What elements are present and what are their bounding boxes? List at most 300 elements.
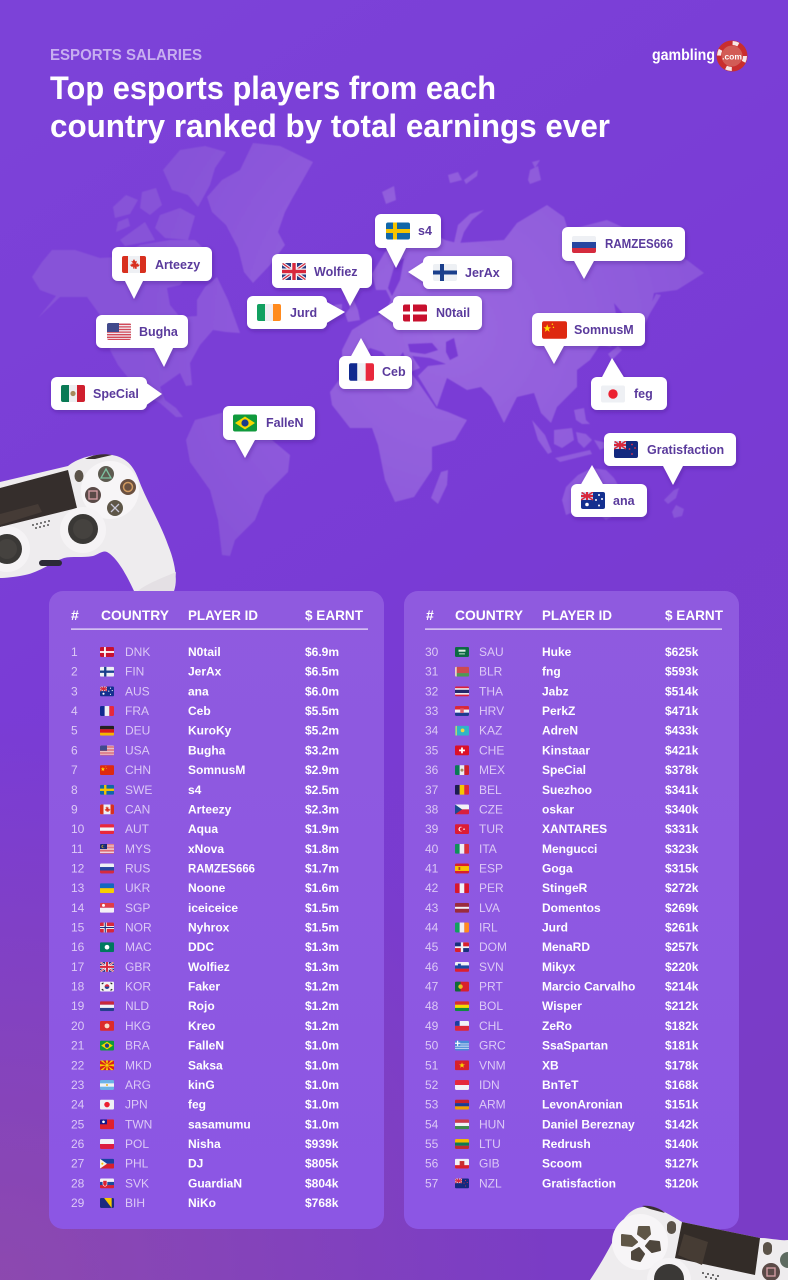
row 48: $212k [665, 999, 699, 1013]
row 43: LVA [479, 901, 500, 915]
row 49: $182k [665, 1019, 699, 1033]
row 26: $939k [305, 1137, 339, 1151]
row 36: SpeCial [542, 763, 586, 777]
row 52: $168k [665, 1078, 699, 1092]
row 57 [425, 1176, 699, 1190]
row 12: $1.7m [305, 862, 339, 876]
row 53: $151k [665, 1098, 699, 1112]
row 31 [425, 665, 699, 679]
row 16: DDC [188, 940, 214, 954]
row 16 [71, 940, 339, 954]
row 54 [425, 1117, 699, 1131]
row 29 [71, 1196, 339, 1210]
table header left: $ EARNT [305, 607, 363, 623]
row 22: Saksa [188, 1058, 223, 1072]
callout: Arteezy (Canada) [112, 247, 212, 299]
callout: Jurd (Ireland) [247, 296, 345, 329]
row 1: $6.9m [305, 645, 339, 659]
row 10: 10 [71, 822, 85, 836]
row 33: 33 [425, 704, 439, 718]
row 53: LevonAronian [542, 1098, 623, 1112]
row 30: Huke [542, 645, 572, 659]
row 38: oskar [542, 802, 574, 816]
row 27 [71, 1157, 339, 1171]
row 52: IDN [479, 1078, 500, 1092]
row 1: N0tail [188, 645, 221, 659]
row 43 [425, 901, 699, 915]
callout: FalleN (Brazil): FalleN [266, 416, 304, 430]
row 4: 4 [71, 704, 78, 718]
row 17: 17 [71, 960, 85, 974]
callout: Bugha (USA): Bugha [139, 325, 179, 339]
row 55: $140k [665, 1137, 699, 1151]
row 13: $1.6m [305, 881, 339, 895]
row 12 [71, 862, 339, 876]
row 18: $1.2m [305, 980, 339, 994]
row 22: 22 [71, 1058, 85, 1072]
row 4 [71, 704, 339, 718]
row 21: 21 [71, 1039, 85, 1053]
row 50 [425, 1039, 699, 1053]
row 14 [71, 901, 339, 915]
row 22: $1.0m [305, 1058, 339, 1072]
row 56: $127k [665, 1157, 699, 1171]
row 27: PHL [125, 1157, 149, 1171]
row 35: Kinstaar [542, 743, 590, 757]
callout: Ceb (France) [339, 338, 412, 389]
row 23 [71, 1078, 339, 1092]
table header left [71, 607, 368, 630]
callout: FalleN (Brazil) [223, 406, 315, 458]
row 2: JerAx [188, 665, 222, 679]
row 35: $421k [665, 743, 699, 757]
table header right: # [426, 607, 434, 623]
callout: N0tail (Denmark): N0tail [436, 306, 470, 320]
callout: JerAx (Finland) [408, 256, 512, 289]
row 49: CHL [479, 1019, 503, 1033]
row 40: $323k [665, 842, 699, 856]
row 3: $6.0m [305, 684, 339, 698]
row 30: SAU [479, 645, 504, 659]
row 28 [71, 1176, 339, 1190]
row 11: MYS [125, 842, 151, 856]
seas [388, 258, 458, 360]
row 28: 28 [71, 1176, 85, 1190]
row 4: $5.5m [305, 704, 339, 718]
row 43: 43 [425, 901, 439, 915]
row 33: $471k [665, 704, 699, 718]
callout: Bugha (USA) [96, 315, 188, 367]
row 5: DEU [125, 724, 150, 738]
row 16: MAC [125, 940, 152, 954]
row 6: Bugha [188, 743, 226, 757]
row 57: $120k [665, 1176, 699, 1190]
row 3 [71, 684, 339, 698]
icon: game controller, top left [0, 454, 176, 591]
row 47: 47 [425, 980, 439, 994]
row 16: $1.3m [305, 940, 339, 954]
row 40: Mengucci [542, 842, 597, 856]
row 17: $1.3m [305, 960, 339, 974]
row 39: $331k [665, 822, 699, 836]
row 15 [71, 920, 339, 934]
callout: s4 (Sweden): s4 [418, 224, 432, 238]
row 44: 44 [425, 920, 439, 934]
row 19 [71, 999, 339, 1013]
callout: JerAx (Finland): JerAx [465, 266, 500, 280]
callout: SpeCial (Mexico) [51, 377, 162, 410]
row 7: SomnusM [188, 763, 245, 777]
row 48: BOL [479, 999, 503, 1013]
row 49: ZeRo [542, 1019, 572, 1033]
row 22: MKD [125, 1058, 152, 1072]
row 6: $3.2m [305, 743, 339, 757]
row 25: $1.0m [305, 1117, 339, 1131]
row 22 [71, 1058, 339, 1072]
row 36: MEX [479, 763, 505, 777]
row 42: $272k [665, 881, 699, 895]
row 23: kinG [188, 1078, 215, 1092]
row 47: Marcio Carvalho [542, 980, 635, 994]
row 7: 7 [71, 763, 78, 777]
row 42: StingeR [542, 881, 588, 895]
row 16: 16 [71, 940, 85, 954]
table header right: PLAYER ID [542, 607, 612, 623]
row 37: Suezhoo [542, 783, 592, 797]
callout: Jurd (Ireland): Jurd [290, 306, 317, 320]
row 11: 11 [71, 842, 84, 856]
row 4: Ceb [188, 704, 211, 718]
row 8: SWE [125, 783, 152, 797]
row 35: 35 [425, 743, 439, 757]
row 25: 25 [71, 1117, 85, 1131]
row 30 [425, 645, 699, 659]
row 48: 48 [425, 999, 439, 1013]
table header left: PLAYER ID [188, 607, 258, 623]
row 12: RAMZES666 [188, 862, 255, 876]
row 52 [425, 1078, 699, 1092]
icon: game controller, bottom right [590, 1206, 788, 1280]
table header right [425, 607, 723, 630]
row 3: ana [188, 684, 209, 698]
row 44 [425, 920, 699, 934]
row 10: AUT [125, 822, 150, 836]
row 2: $6.5m [305, 665, 339, 679]
world map [32, 143, 704, 556]
row 38: 38 [425, 802, 439, 816]
row 4: FRA [125, 704, 149, 718]
row 38 [425, 802, 699, 816]
row 5: KuroKy [188, 724, 232, 738]
row 28: $804k [305, 1176, 339, 1190]
row 39: 39 [425, 822, 439, 836]
row 32: $514k [665, 684, 699, 698]
row 15: $1.5m [305, 920, 339, 934]
row 19: Rojo [188, 999, 215, 1013]
row 19: NLD [125, 999, 149, 1013]
row 7 [71, 763, 339, 777]
panel: ranks 1 to 29 [49, 591, 384, 1229]
row 20: HKG [125, 1019, 151, 1033]
row 12: RUS [125, 862, 150, 876]
row 55: LTU [479, 1137, 501, 1151]
row 38: $340k [665, 802, 699, 816]
row 44: IRL [479, 920, 498, 934]
table header right: COUNTRY [455, 607, 524, 623]
row 56: Scoom [542, 1157, 582, 1171]
row 13: Noone [188, 881, 226, 895]
row 1 [71, 645, 339, 659]
row 9: $2.3m [305, 802, 339, 816]
row 21: FalleN [188, 1039, 224, 1053]
row 41: 41 [425, 862, 439, 876]
callout: SomnusM (China) [532, 313, 645, 364]
row 8 [71, 783, 339, 797]
row 26: POL [125, 1137, 149, 1151]
row 33 [425, 704, 699, 718]
row 30: $625k [665, 645, 699, 659]
row 51 [425, 1058, 699, 1072]
row 18: 18 [71, 980, 85, 994]
logo: gambling.com [652, 40, 748, 72]
row 9: Arteezy [188, 802, 232, 816]
row 15: Nyhrox [188, 920, 230, 934]
row 50: GRC [479, 1039, 506, 1053]
row 1: DNK [125, 645, 150, 659]
row 28: SVK [125, 1176, 149, 1190]
row 57: NZL [479, 1176, 502, 1190]
row 10: Aqua [188, 822, 218, 836]
row 24: 24 [71, 1098, 85, 1112]
row 30: 30 [425, 645, 439, 659]
callout: ana (Australia) [571, 465, 647, 517]
row 15: NOR [125, 920, 152, 934]
row 54: HUN [479, 1117, 505, 1131]
row 45 [425, 940, 699, 954]
row 25: TWN [125, 1117, 152, 1131]
row 24: JPN [125, 1098, 148, 1112]
row 5: $5.2m [305, 724, 339, 738]
row 51: $178k [665, 1058, 699, 1072]
row 37: $341k [665, 783, 699, 797]
row 24: feg [188, 1098, 206, 1112]
row 52: 52 [425, 1078, 439, 1092]
row 46 [425, 960, 699, 974]
row 52: BnTeT [542, 1078, 579, 1092]
row 50: SsaSpartan [542, 1039, 608, 1053]
row 13 [71, 881, 339, 895]
row 37: 37 [425, 783, 439, 797]
row 39: TUR [479, 822, 504, 836]
callout: feg (Japan): feg [634, 387, 653, 401]
row 34: AdreN [542, 724, 578, 738]
row 33: PerkZ [542, 704, 575, 718]
row 2 [71, 665, 339, 679]
callout: Gratisfaction (New Zealand) [604, 433, 736, 485]
row 31: 31 [425, 665, 439, 679]
callout: Ceb (France): Ceb [382, 365, 406, 379]
row 39: XANTARES [542, 822, 607, 836]
row 31: fng [542, 665, 561, 679]
row 37: BEL [479, 783, 502, 797]
callout: N0tail (Denmark) [378, 296, 482, 330]
callout: SpeCial (Mexico): SpeCial [93, 387, 139, 401]
row 41: ESP [479, 862, 503, 876]
callout: Arteezy (Canada): Arteezy [155, 258, 200, 272]
row 44: $261k [665, 920, 699, 934]
row 20: 20 [71, 1019, 85, 1033]
callout: Wolfiez (UK): Wolfiez [314, 265, 358, 279]
row 24 [71, 1098, 339, 1112]
row 26: 26 [71, 1137, 85, 1151]
row 32: 32 [425, 684, 439, 698]
row 54: 54 [425, 1117, 439, 1131]
callout: feg (Japan) [591, 358, 667, 410]
row 51: XB [542, 1058, 559, 1072]
row 14: iceiceice [188, 901, 238, 915]
row 34: 34 [425, 724, 439, 738]
row 11: $1.8m [305, 842, 339, 856]
row 50: $181k [665, 1039, 699, 1053]
row 53: ARM [479, 1098, 506, 1112]
row 57: 57 [425, 1176, 439, 1190]
row 1: 1 [71, 645, 78, 659]
callout: RAMZES666 (Russia) [562, 227, 685, 279]
row 29: BIH [125, 1196, 145, 1210]
row 47: $214k [665, 980, 699, 994]
row 12: 12 [71, 862, 85, 876]
table header right: $ EARNT [665, 607, 723, 623]
row 40: 40 [425, 842, 439, 856]
row 14: SGP [125, 901, 150, 915]
row 3: 3 [71, 684, 78, 698]
row 20: $1.2m [305, 1019, 339, 1033]
row 25: sasamumu [188, 1117, 251, 1131]
row 41: $315k [665, 862, 699, 876]
row 9 [71, 802, 339, 816]
row 43: Domentos [542, 901, 601, 915]
row 6 [71, 743, 339, 757]
callout: Gratisfaction (New Zealand): Gratisfaction [647, 443, 724, 457]
title: country ranked by total earnings ever [50, 108, 610, 144]
row 23: 23 [71, 1078, 85, 1092]
row 32: Jabz [542, 684, 569, 698]
logo: gambling.com: gambling [652, 47, 715, 64]
row 36 [425, 763, 699, 777]
row 45: 45 [425, 940, 439, 954]
row 42 [425, 881, 699, 895]
row 46: 46 [425, 960, 439, 974]
row 33: HRV [479, 704, 504, 718]
row 51: VNM [479, 1058, 506, 1072]
row 19: 19 [71, 999, 85, 1013]
row 53: 53 [425, 1098, 439, 1112]
row 11: xNova [188, 842, 224, 856]
callout: ana (Australia): ana [613, 494, 636, 508]
row 26: Nisha [188, 1137, 221, 1151]
row 2: FIN [125, 665, 144, 679]
row 42: 42 [425, 881, 439, 895]
row 45: MenaRD [542, 940, 590, 954]
row 47: PRT [479, 980, 503, 994]
row 8: 8 [71, 783, 78, 797]
row 18: KOR [125, 980, 151, 994]
row 17 [71, 960, 339, 974]
row 18 [71, 980, 339, 994]
row 56: 56 [425, 1157, 439, 1171]
row 18: Faker [188, 980, 220, 994]
row 13: UKR [125, 881, 151, 895]
row 11 [71, 842, 339, 856]
row 9: CAN [125, 802, 150, 816]
row 31: $593k [665, 665, 699, 679]
row 29: 29 [71, 1196, 85, 1210]
row 55 [425, 1137, 699, 1151]
row 21: BRA [125, 1039, 150, 1053]
row 54: $142k [665, 1117, 699, 1131]
row 54: Daniel Bereznay [542, 1117, 635, 1131]
row 37 [425, 783, 699, 797]
row 23: $1.0m [305, 1078, 339, 1092]
row 20: Kreo [188, 1019, 215, 1033]
row 38: CZE [479, 802, 503, 816]
heading: esports salaries: ESPORTS SALARIES [50, 47, 202, 64]
row 48 [425, 999, 699, 1013]
row 27: DJ [188, 1157, 203, 1171]
row 35: CHE [479, 743, 504, 757]
row 17: GBR [125, 960, 151, 974]
row 41 [425, 862, 699, 876]
row 32: THA [479, 684, 503, 698]
row 13: 13 [71, 881, 85, 895]
row 31: BLR [479, 665, 503, 679]
row 26 [71, 1137, 339, 1151]
row 27: $805k [305, 1157, 339, 1171]
row 14: $1.5m [305, 901, 339, 915]
table header left: # [71, 607, 79, 623]
row 28: GuardiaN [188, 1176, 242, 1190]
row 49 [425, 1019, 699, 1033]
row 49: 49 [425, 1019, 439, 1033]
row 20 [71, 1019, 339, 1033]
row 21 [71, 1039, 339, 1053]
row 53 [425, 1098, 699, 1112]
row 3: AUS [125, 684, 150, 698]
row 46: Mikyx [542, 960, 576, 974]
row 34: $433k [665, 724, 699, 738]
row 34 [425, 724, 699, 738]
row 2: 2 [71, 665, 78, 679]
row 14: 14 [71, 901, 85, 915]
row 55: 55 [425, 1137, 439, 1151]
row 35 [425, 743, 699, 757]
row 7: $2.9m [305, 763, 339, 777]
callout: s4 (Sweden) [375, 214, 441, 268]
row 56 [425, 1157, 699, 1171]
row 5: 5 [71, 724, 78, 738]
row 48: Wisper [542, 999, 582, 1013]
callout: Wolfiez (UK) [272, 254, 372, 306]
row 25 [71, 1117, 339, 1131]
row 50: 50 [425, 1039, 439, 1053]
row 40 [425, 842, 699, 856]
row 40: ITA [479, 842, 497, 856]
row 29: NiKo [188, 1196, 216, 1210]
row 47 [425, 980, 699, 994]
row 55: Redrush [542, 1137, 591, 1151]
row 46: $220k [665, 960, 699, 974]
row 39 [425, 822, 699, 836]
